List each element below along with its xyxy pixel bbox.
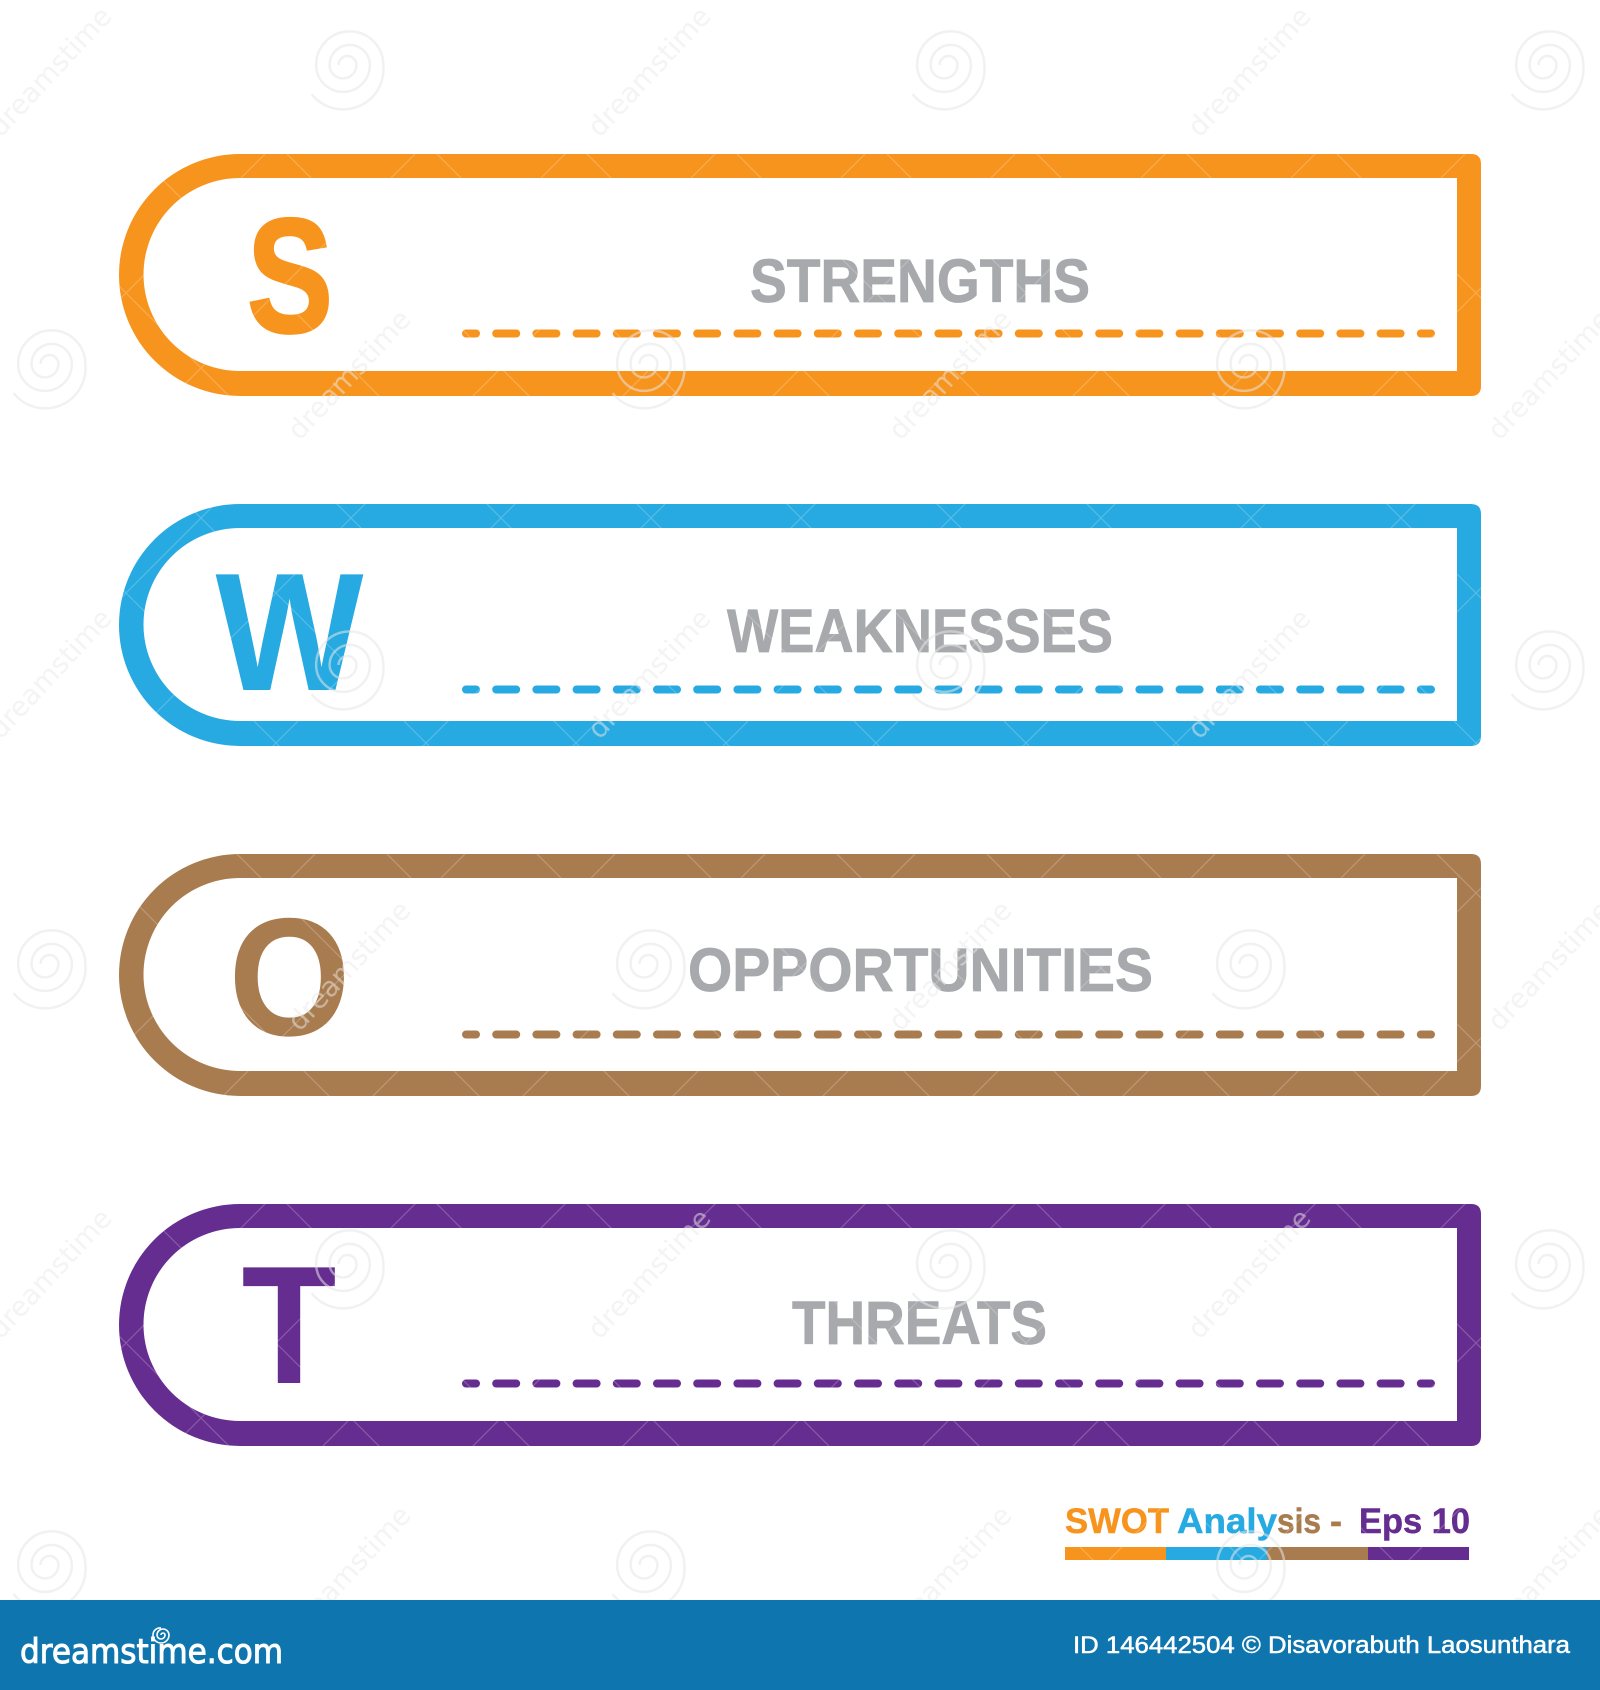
letter S: S [247, 184, 333, 367]
heading: strengths: STRENGTHS [750, 247, 1090, 315]
letter T: T [242, 1231, 336, 1419]
heading: opportunities: OPPORTUNITIES [688, 936, 1153, 1004]
text: dreamstime [1181, 1203, 1317, 1345]
text: dreamstime [882, 895, 1018, 1037]
heading: threats: THREATS [792, 1289, 1047, 1357]
legend: swot analysis eps 10: SWOT [1065, 1502, 1169, 1541]
text: dreamstime [581, 1203, 717, 1345]
text: dreamstime [1181, 603, 1317, 745]
panel: weaknesses [119, 504, 1481, 746]
text: dreamstime [281, 895, 417, 1037]
text: dreamstime [281, 1500, 417, 1642]
panel: threats [119, 1204, 1481, 1446]
legend: swot analysis eps 10: sis [1277, 1502, 1321, 1541]
legend: swot analysis eps 10: Eps 10 [1359, 1502, 1470, 1541]
letter W: W [216, 538, 364, 726]
letter O: O [228, 883, 350, 1071]
footer bar [0, 1600, 1600, 1690]
legend: swot analysis eps 10: Analy [1177, 1502, 1278, 1541]
text: dreamstime [581, 603, 717, 745]
panel: strengths [119, 154, 1481, 396]
text: dreamstime [882, 304, 1018, 446]
text: dreamstime [281, 304, 417, 446]
text: dreamstime [581, 1, 717, 143]
logo: dreamstime.com: dreamstime.com [20, 1632, 283, 1672]
credit text: ID 146442504 © Disavorabuth Laosunthara [1073, 1632, 1571, 1659]
text: dreamstime [1181, 1, 1317, 143]
panel: opportunities [119, 854, 1481, 1096]
heading: weaknesses: WEAKNESSES [727, 597, 1113, 665]
dashed line: threats [466, 1380, 1431, 1388]
legend: swot analysis eps 10: - [1330, 1502, 1342, 1541]
text: dreamstime [882, 1500, 1018, 1642]
dashed line: strengths [466, 330, 1431, 338]
legend: swot analysis eps 10 [1065, 1502, 1470, 1560]
dashed line: opportunities [466, 1030, 1431, 1038]
dashed line: weaknesses [466, 686, 1431, 694]
